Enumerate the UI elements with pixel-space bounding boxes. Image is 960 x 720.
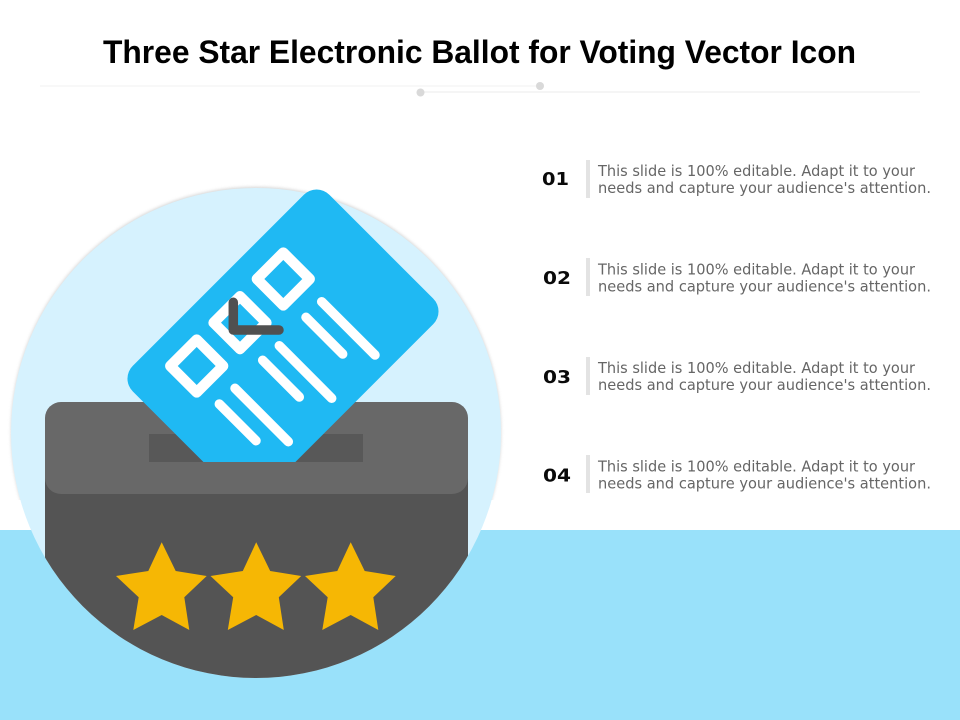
item 04: This slide is 100% editable. Adapt it to your <box>597 458 916 476</box>
title: Three Star Electronic Ballot for Voting Vector Icon <box>103 34 856 70</box>
item 03 <box>543 357 931 395</box>
item 02 <box>543 258 931 296</box>
illustration: ballot box in circle <box>11 182 501 680</box>
ballot text lines <box>219 302 375 442</box>
three stars <box>116 542 396 630</box>
item 01: 01 <box>542 169 569 190</box>
check mark <box>233 302 279 330</box>
item 01: needs and capture your audience's attention. <box>598 179 931 197</box>
item 02: This slide is 100% editable. Adapt it to your <box>597 260 916 278</box>
circle backdrop <box>11 187 501 678</box>
ballot slot <box>149 434 363 462</box>
item 01: This slide is 100% editable. Adapt it to your <box>597 162 916 180</box>
ballot box body <box>45 478 468 678</box>
background band <box>0 530 960 720</box>
title divider <box>40 82 920 96</box>
item 02: 02 <box>543 268 571 289</box>
ballot box lid <box>45 402 468 494</box>
item 03: 03 <box>543 367 571 388</box>
item 02: needs and capture your audience's attention. <box>598 278 931 296</box>
ballot paper <box>127 190 438 462</box>
item 04: needs and capture your audience's attention. <box>598 474 931 492</box>
item 03: This slide is 100% editable. Adapt it to your <box>597 359 916 377</box>
item 04 <box>543 455 931 493</box>
item 04: 04 <box>543 466 571 486</box>
item 01 <box>542 160 931 198</box>
item 03: needs and capture your audience's attention. <box>598 376 931 394</box>
checkbox marks <box>170 253 310 392</box>
